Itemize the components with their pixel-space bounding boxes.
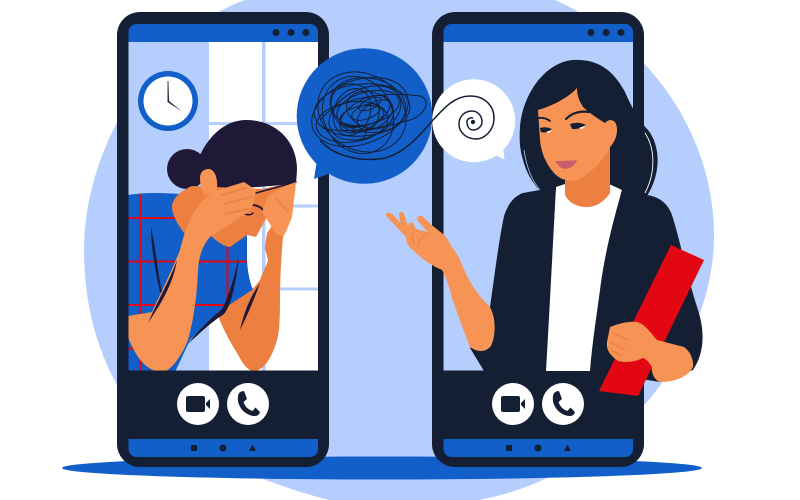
gesturing arm [386,212,495,351]
lips [555,160,577,169]
screen: left phone [128,42,318,370]
clothing fold lines [148,227,260,344]
phone button: right phone [542,383,584,425]
neck [565,147,610,207]
person: therapist [386,60,704,396]
top bar: right phone [444,24,633,42]
finger creases [222,188,288,214]
hair bun [167,149,202,189]
ear [200,169,217,195]
video button: right phone [492,383,534,425]
icon: wall clock [138,71,198,131]
top bar: left phone [128,24,318,42]
window [209,42,318,370]
eyes [540,123,586,133]
arm holding folder [607,322,693,382]
phone button: left phone [227,383,269,425]
main arm and hand [128,182,256,372]
jacket [470,187,703,382]
spiral centre [471,120,475,124]
screen: right phone [444,42,633,370]
person: distressed client [128,120,297,372]
camera dots: left phone [272,29,310,36]
right hand [262,182,296,236]
phone: left [117,12,329,467]
right arm [217,215,292,371]
nav icons: left phone [191,444,256,452]
folder [599,245,704,396]
shirt [128,193,253,372]
speech bubble: tangled thoughts [297,48,515,184]
nav icons: right phone [506,444,571,452]
hair [200,120,297,190]
shirt plaid [128,194,247,372]
hand creases [610,333,628,356]
eyebrows [538,112,589,121]
finger creases [400,218,427,247]
phone: right [432,12,644,467]
background blob [84,0,714,500]
face [538,88,617,181]
hair highlight [645,133,653,193]
ground shadow [62,456,702,480]
white shirt [546,184,622,371]
bottom nav: left phone [128,439,318,457]
face [172,182,296,247]
scribble [302,56,426,168]
bubble: blue [297,48,432,184]
hair highlight left [524,150,540,190]
camera dots: right phone [588,29,624,36]
video button: left phone [177,383,219,425]
bubble: white [432,79,515,162]
bottom nav: right phone [444,439,633,457]
eye marks [245,182,296,215]
hair [520,60,658,196]
thread spiral [320,96,494,159]
